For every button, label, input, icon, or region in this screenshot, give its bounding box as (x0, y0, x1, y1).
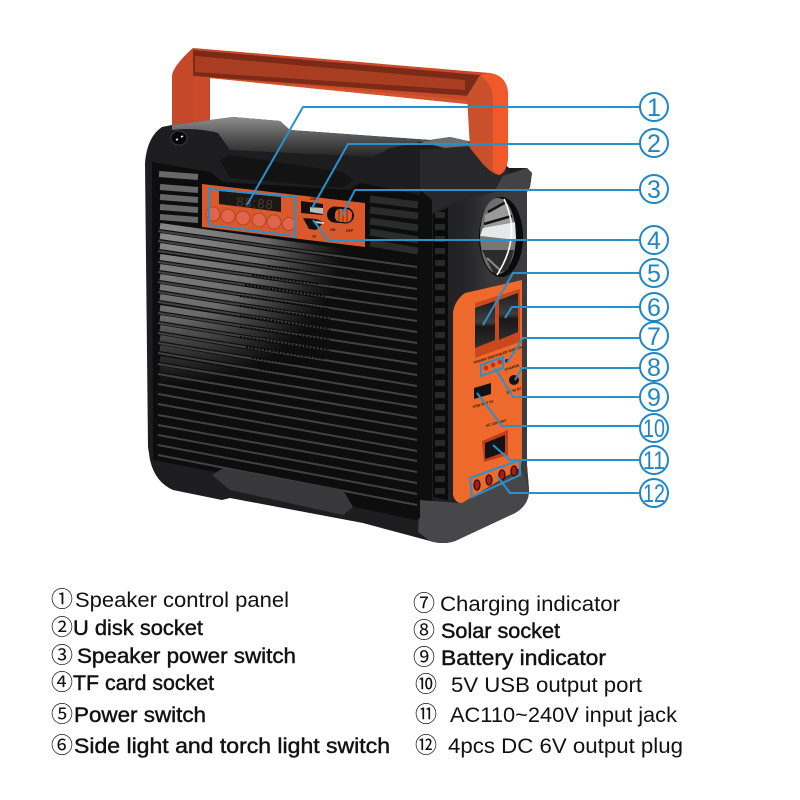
callout circles: 12 (643, 480, 665, 508)
legend right column: 5V USB output port (451, 674, 642, 697)
control panel: OFF (346, 229, 354, 233)
AC jack (482, 430, 508, 462)
upper grip (220, 155, 353, 188)
side wall (420, 190, 529, 543)
callout circles (640, 93, 668, 508)
speaker switch (326, 206, 355, 224)
jack on top (171, 131, 187, 145)
DC jacks (474, 466, 517, 490)
side orange panel: CHARGE (504, 363, 521, 372)
TF socket (303, 218, 324, 230)
line 1 (247, 107, 640, 205)
right short slats (370, 199, 418, 251)
USB port (474, 383, 491, 399)
speaker dots (240, 266, 330, 376)
line 3 (342, 190, 640, 215)
line 7 (507, 338, 640, 363)
light rocker (499, 293, 518, 340)
legend right column: ⑨ (413, 640, 435, 672)
line 10 (477, 393, 640, 426)
line 5 (483, 273, 640, 325)
legend left column: Side light and torch light switch (74, 735, 390, 758)
callout circles: 3 (647, 176, 661, 204)
USB socket (301, 201, 323, 215)
jack box (470, 460, 520, 497)
legend left column (51, 582, 390, 760)
legend right column: ⑩ (415, 667, 437, 699)
side orange panel: USB OUT 5V (472, 399, 495, 409)
side cap (495, 168, 532, 190)
foot (418, 470, 529, 543)
legend left column: ② (51, 610, 73, 642)
indicator box (481, 357, 503, 376)
handle right leg (467, 73, 508, 175)
legend left column: TF card socket (73, 672, 214, 695)
control panel: 88:88 (236, 194, 274, 212)
callout circles: 5 (647, 260, 661, 288)
handle (172, 48, 490, 130)
legend left column: ⑥ (51, 728, 73, 760)
side orange panel (453, 280, 523, 503)
legend right column: 4pcs DC 6V output plug (448, 735, 683, 758)
buttons (206, 207, 296, 230)
line 8 (515, 368, 640, 380)
legend left column: Speaker power switch (77, 645, 296, 668)
top ridge highlight (172, 117, 430, 157)
legend left column: ④ (51, 665, 73, 697)
legend right column: ⑦ (413, 586, 435, 618)
power rocker (475, 301, 495, 348)
legend left column: ③ (51, 638, 73, 670)
slat edge lines (158, 231, 417, 505)
torch (479, 197, 523, 277)
callout circles: 4 (647, 227, 661, 255)
legend left column: ⑤ (51, 697, 73, 729)
line 6 (505, 307, 640, 318)
callout lines (209, 107, 640, 497)
shoulder (420, 146, 527, 213)
legend right column: Charging indicator (440, 593, 620, 616)
line 11 (493, 445, 640, 460)
top right surface (420, 137, 472, 150)
AC label: AC 110-240V (485, 418, 508, 428)
line 9 (495, 368, 640, 397)
display (219, 191, 281, 212)
legend right column: ⑪ (415, 697, 437, 729)
legend left column: U disk socket (73, 617, 203, 640)
control panel (202, 184, 365, 247)
callout circles: 6 (647, 294, 661, 322)
control panel: TF (312, 235, 317, 239)
side ribbed column (433, 208, 448, 500)
bottom grip (212, 468, 353, 515)
speaker body (145, 117, 532, 543)
callout circles: 11 (643, 447, 665, 475)
legend left column: Speaker control panel (75, 589, 289, 612)
indicators (484, 360, 502, 370)
side orange panel: DC IN 9V (506, 386, 522, 395)
line 2 (312, 144, 640, 208)
slat highlights (160, 226, 417, 435)
legend right column: AC110~240V input jack (450, 704, 678, 727)
callout circles: 8 (647, 354, 661, 382)
control panel: USB (310, 197, 318, 201)
rocker recess (475, 289, 520, 358)
legend right column: ⑧ (413, 613, 435, 645)
side orange panel: LED SWITCH (500, 345, 523, 356)
callout circles: 9 (647, 384, 661, 412)
grille frame (152, 162, 420, 520)
legend right column: ⑫ (415, 728, 437, 760)
panel box (209, 189, 295, 236)
callout circles: 10 (643, 415, 665, 443)
side orange panel: POWER SWITCH (473, 352, 502, 365)
legend left column: ① (51, 582, 73, 614)
line 4 (313, 220, 640, 240)
left short slats (159, 174, 198, 220)
line 12 (498, 477, 640, 493)
legend left column: Power switch (74, 704, 206, 727)
legend right column (413, 586, 683, 760)
legend right column: Solar socket (441, 620, 560, 643)
solar socket (509, 375, 519, 385)
callout circles: 1 (647, 94, 661, 122)
callout circles: 7 (647, 323, 661, 351)
legend right column: Battery indicator (441, 647, 606, 670)
control panel: ON (330, 228, 336, 232)
callout circles: 2 (647, 130, 661, 158)
